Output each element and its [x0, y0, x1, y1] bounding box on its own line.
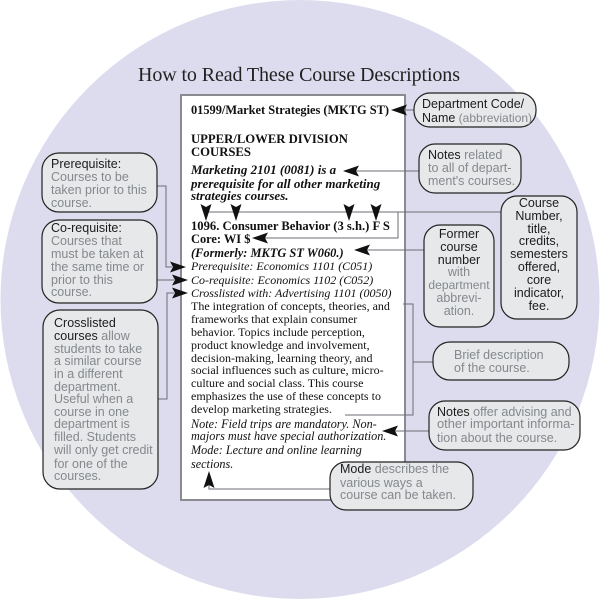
notes and mode text: sections.: [191, 457, 233, 471]
callout: brief description: of the course.: [454, 361, 530, 375]
callout: co-requisite: the same time or: [51, 260, 144, 274]
department notes text: prerequisite for all other marketing: [190, 176, 381, 191]
callout: course number details: credits,: [519, 234, 559, 248]
callout: department notes: related: [461, 148, 502, 162]
notes and mode text: Note: Field trips are mandatory. Non-: [190, 417, 377, 431]
former number: (Formerly: MKTG ST W060.): [191, 246, 344, 260]
callout: course number details: title,: [528, 222, 550, 236]
course title line: Core: WI $: [191, 232, 250, 246]
division heading: UPPER/LOWER DIVISION: [191, 132, 348, 146]
course title line: 1096. Consumer Behavior (3 s.h.) F S: [191, 219, 390, 233]
arrow: core indicator: [252, 232, 268, 244]
callout: department code: (abbreviation): [455, 111, 532, 125]
callout: department notes: ment's courses.: [428, 174, 515, 188]
requisites and crosslisting: Co-requisite: Economics 1102 (C052): [191, 273, 373, 287]
callout: crosslisted courses: will only get credit: [53, 443, 153, 457]
callout: department notes: to all of depart-: [428, 161, 511, 175]
callout: department notes: [419, 144, 521, 193]
callout: former course number: Former: [439, 227, 479, 241]
callout: course number details: indicator,: [514, 286, 564, 300]
department heading: 01599/Market Strategies (MKTG ST): [191, 103, 389, 117]
department notes text: strategies courses.: [190, 188, 288, 203]
callout: department code: Name: [422, 111, 455, 125]
callout: prerequisite: Courses to be: [51, 170, 129, 184]
arrow: credits: [344, 204, 354, 221]
callout: course number details: core: [527, 273, 551, 287]
arrow: course number: [200, 204, 212, 221]
arrow: former number: [354, 244, 370, 256]
callout: former course number: with: [447, 265, 470, 279]
panel: sample course description page: [181, 95, 405, 500]
callout: crosslisted courses: Useful when a: [54, 392, 133, 406]
callout: crosslisted courses: courses.: [54, 469, 101, 483]
callout: mode: describes the: [371, 462, 449, 476]
course description body: social influences such as culture, micro-: [191, 363, 384, 377]
callout: co-requisite: prior to this: [51, 273, 113, 287]
course description body: The integration of concepts, theories, and: [191, 299, 390, 313]
course description body: emphasizes the use of these concepts to: [191, 389, 381, 403]
callout: department notes: Notes: [428, 148, 461, 162]
arrow: department notes: [343, 166, 359, 176]
arrowheads: [170, 104, 407, 488]
callout: crosslisted courses: courses: [54, 329, 98, 343]
callout: crosslisted courses: allow: [98, 329, 131, 343]
callout: notes: tion about the course.: [437, 431, 557, 445]
callout: department code: [414, 93, 536, 127]
callout: notes: Notes: [437, 405, 470, 419]
arrow: mode: [204, 471, 214, 488]
callout: co-requisite: must be taken at: [51, 247, 144, 261]
callout: former course number: department: [428, 278, 490, 292]
course description body: behavior. Topics include perception,: [191, 325, 365, 339]
course description body: develop marketing strategies.: [191, 402, 332, 416]
callout: former course number: ation.: [444, 304, 474, 318]
callout: prerequisite: Prerequisite:: [51, 157, 121, 171]
callout: former course number: [424, 225, 494, 327]
callout: crosslisted courses: in a different: [54, 367, 123, 381]
callout: crosslisted courses: filled. Students: [54, 430, 136, 444]
callout: mode: various ways a: [340, 476, 423, 490]
arrow: prerequisite: [170, 262, 186, 272]
callout: prerequisite: taken prior to this: [51, 183, 147, 197]
division heading: COURSES: [191, 145, 251, 159]
notes and mode text: majors must have special authorization.: [191, 429, 386, 443]
arrow: co-requisite: [172, 274, 188, 286]
arrow: course title: [230, 204, 242, 221]
arrow: semesters: [370, 204, 382, 221]
callout: co-requisite: [42, 220, 157, 303]
callout: former course number: abbrevi-: [436, 291, 482, 305]
callout: mode: [330, 462, 473, 510]
callout: course number details: Number,: [515, 209, 563, 223]
callout: prerequisite: course.: [51, 196, 92, 210]
callout: course number details: semesters: [510, 247, 568, 261]
callout: course number details: Course: [519, 196, 559, 210]
callout: crosslisted courses: students to take: [54, 342, 142, 356]
title: How to Read These Course Descriptions: [138, 64, 460, 86]
callout: crosslisted courses: department is: [54, 417, 130, 431]
callout: course number details: offered,: [518, 260, 560, 274]
connector lines: [157, 110, 501, 489]
department notes text: Marketing 2101 (0081) is a: [190, 162, 337, 177]
callout: crosslisted courses: department.: [54, 380, 121, 394]
callout: brief description: Brief description: [454, 348, 544, 362]
notes and mode text: Mode: Lecture and online learning: [190, 443, 362, 457]
requisites and crosslisting: Prerequisite: Economics 1101 (C051): [190, 259, 372, 273]
callout: crosslisted courses: Crosslisted: [54, 316, 116, 330]
callout: crosslisted courses: [43, 310, 158, 489]
callout: notes: other important informa-: [437, 416, 575, 431]
course description body: frameworks that explain consumer: [191, 312, 357, 326]
callout: notes: offer advising and: [470, 405, 572, 419]
callout: brief description: [433, 342, 569, 380]
callout: crosslisted courses: a similar course: [54, 354, 142, 368]
callout: co-requisite: Co-requisite:: [51, 221, 122, 235]
course description body: culture and social class. This course: [191, 376, 363, 390]
callout: former course number: course: [440, 240, 478, 254]
callout: mode: course can be taken.: [340, 488, 456, 502]
callout: former course number: number: [438, 253, 480, 267]
callout: course number details: fee.: [529, 299, 549, 313]
callout: mode: Mode: [340, 462, 371, 476]
callout: course number details: [501, 196, 577, 319]
callout: crosslisted courses: for one of the: [54, 457, 128, 471]
callout: co-requisite: course.: [51, 285, 92, 299]
callout: notes: [429, 401, 580, 450]
callout: prerequisite: [42, 153, 157, 212]
arrow: notes: [382, 426, 398, 436]
arrow: crosslisted: [172, 288, 188, 298]
course description body: product knowledge and involvement,: [191, 338, 370, 352]
arrow: department code: [391, 104, 407, 116]
requisites and crosslisting: Crosslisted with: Advertising 1101 (0050): [191, 286, 391, 300]
callout: crosslisted courses: course in one: [54, 405, 129, 419]
callout: department code: Department Code/: [422, 97, 525, 111]
callout: co-requisite: Courses that: [51, 234, 122, 248]
course description body: decision-making, learning theory, and: [191, 351, 372, 365]
